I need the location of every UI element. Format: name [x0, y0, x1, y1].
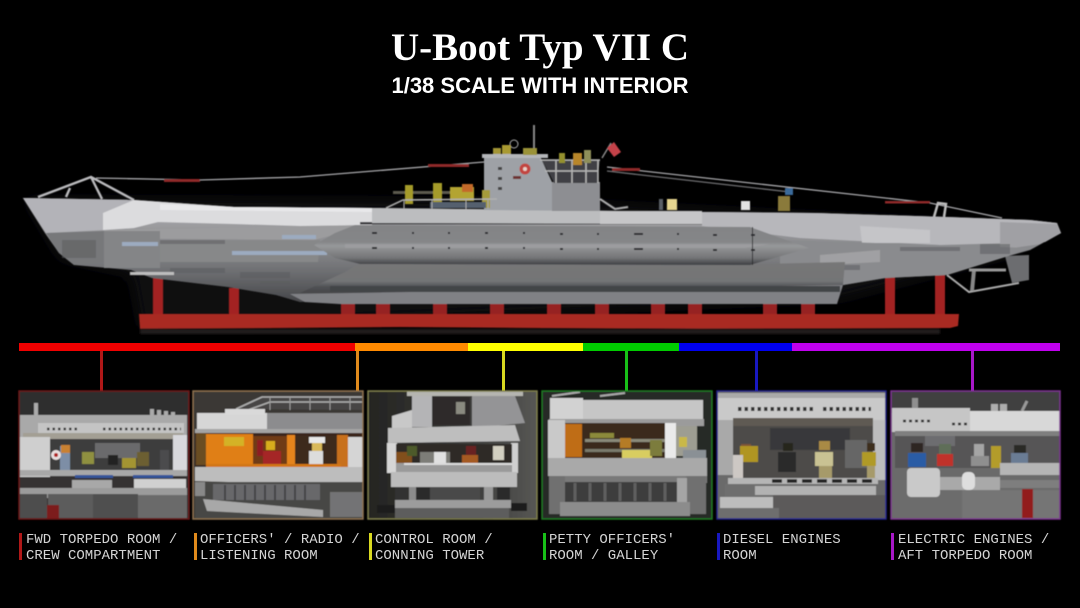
wire insulators [164, 164, 930, 204]
panel: forward torpedo room [19, 391, 189, 519]
tank bolts [372, 227, 755, 265]
caption: control room: CONTROL ROOM / [375, 532, 493, 548]
panel: diesel engines room [717, 391, 886, 519]
section colour bar [19, 343, 1060, 351]
saddle tank [314, 225, 809, 265]
caption: diesel engines [717, 532, 841, 564]
aft deck figures [600, 188, 793, 211]
panel: petty officers room galley [542, 391, 712, 519]
connector lines [100, 351, 974, 392]
crew figures [51, 445, 169, 472]
galley figures [590, 433, 662, 458]
subtitle: 1/38 SCALE WITH INTERIOR [391, 73, 689, 98]
caption: officers room [194, 532, 360, 564]
stern plating [702, 212, 1061, 245]
keel [290, 285, 843, 304]
electric crew [908, 443, 1028, 468]
radio wires and net cutters [38, 162, 1019, 292]
flag [602, 142, 621, 158]
bow plating [23, 198, 134, 233]
plating steps [62, 240, 1010, 286]
caption: control room [369, 532, 493, 564]
red display stand [139, 274, 959, 334]
submarine model [23, 125, 1061, 334]
blue highlights on hull [122, 235, 327, 255]
caption: officers room: LISTENING ROOM [200, 548, 318, 564]
caption: officers room: OFFICERS' / RADIO / [200, 532, 360, 548]
caption: electric engines [891, 532, 1049, 564]
engine crew [733, 441, 876, 480]
caption: electric engines: AFT TORPEDO ROOM [898, 548, 1032, 564]
caption: diesel engines: DIESEL ENGINES [723, 532, 841, 548]
caption: control room: CONNING TOWER [375, 548, 485, 564]
caption: forward torpedo room: CREW COMPARTMENT [26, 548, 160, 564]
caption: petty officers: ROOM / GALLEY [549, 548, 659, 564]
caption: electric engines: ELECTRIC ENGINES / [898, 532, 1049, 548]
deck gun and crew [386, 183, 497, 209]
deck casing [372, 208, 702, 224]
panel: officers radio listening room [193, 391, 363, 519]
title: U-Boot Typ VII C [391, 26, 689, 69]
caption: forward torpedo room [19, 532, 177, 564]
officers [224, 437, 325, 466]
stern skeg [1005, 255, 1029, 283]
crew on tower [493, 145, 591, 165]
hull body [23, 198, 1061, 302]
caption: petty officers [543, 532, 675, 564]
glow behind hull [23, 198, 1060, 330]
lower hull [300, 262, 845, 294]
panel: control room conning tower [368, 391, 537, 519]
caption: diesel engines: ROOM [723, 548, 757, 564]
conning tower [482, 125, 621, 211]
caption: petty officers: PETTY OFFICERS' [549, 532, 675, 548]
panel: electric engines aft torpedo room [891, 391, 1060, 519]
control room equipment [396, 446, 512, 465]
electric engine [907, 468, 1060, 497]
caption: forward torpedo room: FWD TORPEDO ROOM / [26, 532, 177, 548]
